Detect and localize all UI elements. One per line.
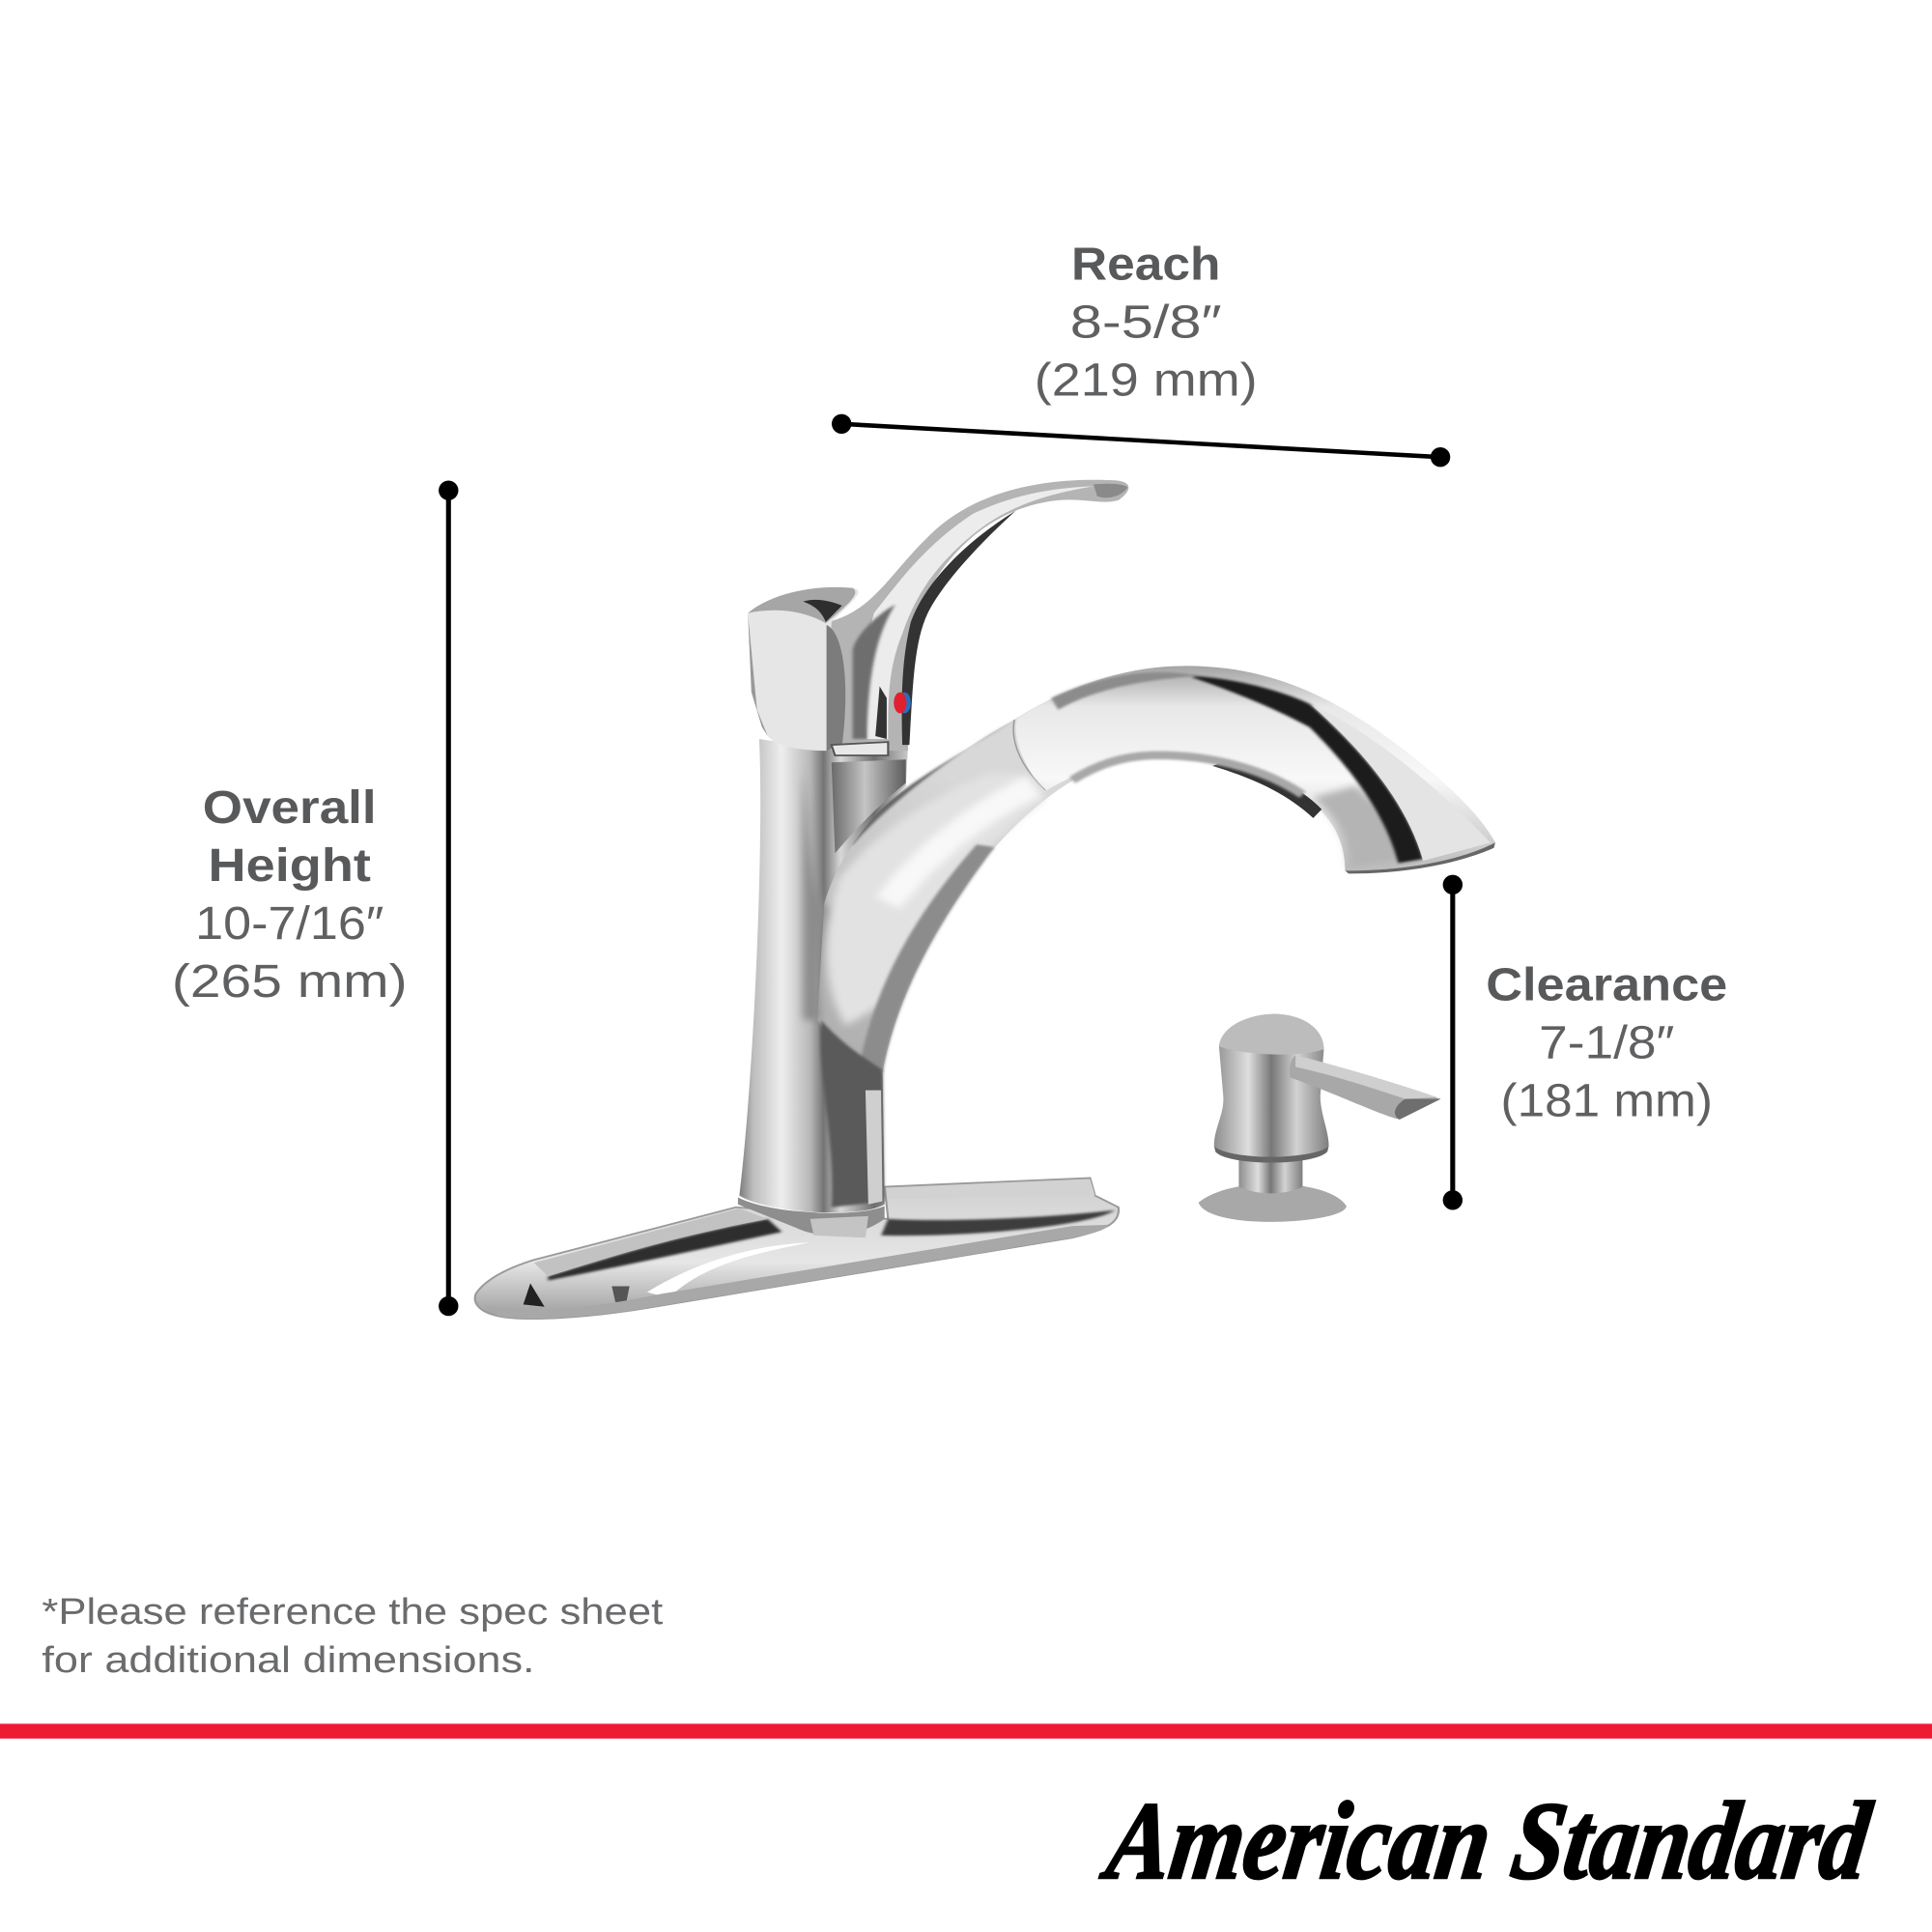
dimension line: reach: [832, 414, 1450, 467]
dimension line: overall height: [439, 480, 458, 1316]
label: overall height: (265 mm): [172, 955, 408, 1008]
red divider bar: [0, 1723, 1932, 1739]
label: clearance: Clearance: [1486, 959, 1727, 1011]
label: clearance: 7-1/8″: [1539, 1017, 1674, 1069]
faucet illustration: [475, 480, 1495, 1319]
hot and cold indicator: [894, 693, 911, 713]
soap dispenser: [1199, 1014, 1440, 1222]
lever handle: [828, 480, 1128, 751]
footnote: [42, 1591, 664, 1681]
label: overall height: Height: [209, 839, 371, 892]
footnote: *Please reference the spec sheet: [42, 1591, 664, 1633]
handle cap: [748, 587, 888, 755]
label: overall height: Overall: [203, 781, 377, 834]
dimension line: clearance: [1443, 875, 1463, 1210]
label: reach: Reach: [1071, 239, 1220, 291]
spout arch: [810, 666, 1495, 1196]
label: reach: [1035, 239, 1258, 406]
faucet column: [738, 739, 908, 1237]
footnote: for additional dimensions.: [42, 1639, 535, 1681]
label: overall height: 10-7/16″: [195, 897, 384, 950]
label: overall height: [172, 781, 408, 1008]
label: clearance: [1486, 959, 1727, 1127]
label: reach: (219 mm): [1035, 354, 1258, 406]
label: clearance: (181 mm): [1501, 1075, 1713, 1127]
label: reach: 8-5/8″: [1070, 296, 1222, 348]
deck plate: [475, 1178, 1119, 1319]
